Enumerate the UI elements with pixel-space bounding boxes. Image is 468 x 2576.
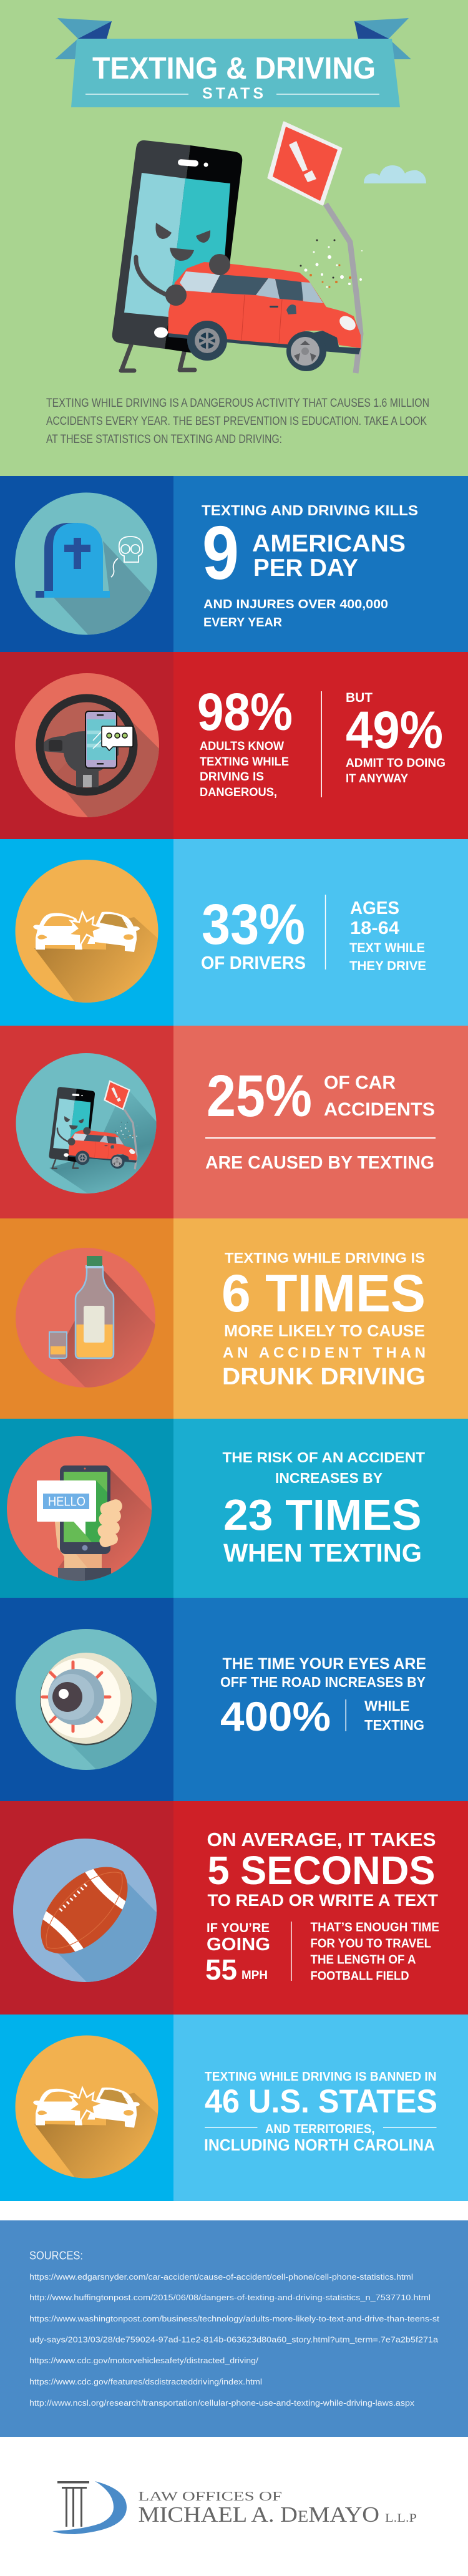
stat: 98% bbox=[197, 683, 293, 799]
stat text: 9 bbox=[202, 510, 239, 595]
stat text: TO READ OR WRITE A TEXT bbox=[207, 1891, 438, 1910]
red car bbox=[168, 262, 361, 371]
stat text: THE LENGTH OF A bbox=[311, 1953, 416, 1966]
stat text: EVERY YEAR bbox=[203, 616, 283, 629]
source links: http://www.huffingtonpost.com/2015/06/08/dangers-of-texting-and-driving-statistics_n_7537710.html bbox=[29, 2293, 431, 2302]
stat text: 6 TIMES bbox=[222, 1264, 426, 1323]
stat text: AN ACCIDENT THAN bbox=[223, 1344, 426, 1361]
stat text: THE RISK OF AN ACCIDENT bbox=[222, 1449, 425, 1465]
icon: car crash repeated bbox=[15, 2035, 176, 2181]
sources heading: SOURCES: bbox=[29, 2250, 83, 2262]
title banner: STATS bbox=[202, 85, 263, 102]
panel: hero bbox=[0, 0, 468, 476]
source links: https://www.cdc.gov/features/dsdistracteddriving/index.html bbox=[29, 2378, 262, 2386]
logo wordmark: LAW OFFICES OF bbox=[139, 2489, 282, 2504]
stat text: THAT’S ENOUGH TIME bbox=[311, 1920, 439, 1934]
stat: ages: AGES bbox=[350, 898, 399, 918]
phone character bbox=[112, 140, 242, 371]
logo wordmark: L.L.P bbox=[385, 2512, 417, 2525]
panel: 25% of car accidents bbox=[0, 1026, 468, 1218]
stat: 49%: BUT bbox=[346, 691, 373, 705]
icon: tombstone and skull bbox=[15, 493, 157, 635]
title banner bbox=[55, 18, 411, 107]
intro text bbox=[46, 397, 429, 446]
stat: 98%: DANGEROUS, bbox=[200, 786, 277, 799]
stat: 25%: ACCIDENTS bbox=[324, 1099, 435, 1120]
stat text: AND TERRITORIES, bbox=[265, 2122, 374, 2136]
stat text: INCREASES BY bbox=[275, 1470, 383, 1486]
stat text: 400% bbox=[220, 1693, 331, 1739]
panel: 9 Americans per day bbox=[0, 476, 468, 655]
stat text: AMERICANS bbox=[252, 530, 406, 557]
stat text: 5 SECONDS bbox=[207, 1848, 436, 1893]
icon: football bbox=[13, 1839, 157, 1982]
stat text: DRUNK DRIVING bbox=[222, 1364, 426, 1390]
stat text: ON AVERAGE, IT TAKES bbox=[207, 1829, 436, 1850]
stat: 98%: 98% bbox=[197, 683, 293, 741]
stat text: TEXTING AND DRIVING KILLS bbox=[202, 502, 418, 518]
stat text bbox=[222, 1449, 425, 1567]
panel: 5 seconds bbox=[0, 1801, 468, 2015]
source links: http://www.ncsl.org/research/transportation/cellular-phone-use-and-texting-while-driving-laws.aspx bbox=[29, 2399, 415, 2408]
icon: hand with phone and hello bubble: HELLO bbox=[48, 1495, 85, 1509]
stat text: IF YOU’RE bbox=[207, 1921, 270, 1935]
source links: https://www.washingtonpost.com/business/technology/adults-more-likely-to-text-and-drive-than-teens-st bbox=[29, 2315, 440, 2323]
panel: sources bbox=[0, 2220, 468, 2437]
stat text: PER DAY bbox=[253, 555, 358, 581]
stat: 49%: ADMIT TO DOING bbox=[346, 757, 446, 770]
source links: https://www.cdc.gov/motorvehiclesafety/distracted_driving/ bbox=[29, 2356, 259, 2365]
icon: mini crash illustration bbox=[16, 1053, 156, 1193]
stat: 98%: DRIVING IS bbox=[200, 770, 264, 784]
stat: ages: TEXT WHILE bbox=[349, 941, 425, 955]
stat: 98%: ADULTS KNOW bbox=[200, 740, 284, 753]
stat text: TEXTING bbox=[364, 1717, 424, 1733]
stat text: 23 TIMES bbox=[223, 1490, 422, 1539]
stat: 33%: OF DRIVERS bbox=[201, 953, 306, 973]
logo: law offices bbox=[52, 2481, 417, 2534]
icon: eyeball bbox=[16, 1629, 157, 1770]
stat text: FOR YOU TO TRAVEL bbox=[311, 1937, 431, 1950]
source links: udy-says/2013/03/28/de759024-97ad-11e2-814b-063623d80a60_story.html?utm_term=.7e7a2b5f271a bbox=[29, 2336, 438, 2345]
panel: 46 U.S. states bbox=[0, 2015, 468, 2201]
stat text: GOING bbox=[207, 1935, 270, 1955]
bent road sign bbox=[268, 122, 361, 373]
stat text bbox=[204, 2070, 437, 2154]
phone hands bbox=[165, 254, 230, 306]
icon: hand with phone and hello bubble bbox=[7, 1436, 156, 1587]
stat text: OFF THE ROAD INCREASES BY bbox=[220, 1674, 426, 1690]
stat: 33%: 33% bbox=[202, 893, 305, 956]
stat: 25%: ARE CAUSED BY TEXTING bbox=[205, 1153, 434, 1173]
stat text: INCLUDING NORTH CAROLINA bbox=[204, 2136, 435, 2154]
stat: 49%: IT ANYWAY bbox=[346, 772, 408, 785]
stat text: WHEN TEXTING bbox=[223, 1538, 422, 1567]
stat: 49%: 49% bbox=[346, 701, 443, 759]
stat text: FOOTBALL FIELD bbox=[311, 1969, 409, 1983]
stat: 49% bbox=[346, 691, 446, 785]
stat: ages: 18-64 bbox=[350, 918, 399, 938]
title banner: TEXTING & DRIVING bbox=[92, 52, 376, 85]
icon: bottle and shot glass bbox=[16, 1248, 155, 1388]
stat text: THE TIME YOUR EYES ARE bbox=[222, 1655, 426, 1673]
panel: 33% of drivers bbox=[0, 839, 468, 1026]
stat text bbox=[205, 1829, 439, 1986]
stat: 25%: OF CAR bbox=[324, 1072, 396, 1093]
intro text: AT THESE STATISTICS ON TEXTING AND DRIVING: bbox=[46, 433, 282, 446]
logo wordmark bbox=[139, 2489, 417, 2527]
stat text: WHILE bbox=[364, 1698, 409, 1714]
stat: 98%: TEXTING WHILE bbox=[200, 756, 289, 769]
logo mark bbox=[52, 2481, 127, 2534]
icon: steering wheel with phone bbox=[15, 673, 159, 817]
logo wordmark: MICHAEL A. D EMAYO bbox=[139, 2502, 379, 2527]
stat text bbox=[220, 1655, 426, 1739]
stat: ages bbox=[349, 898, 426, 973]
debris bbox=[300, 240, 363, 288]
panel: 98 percent know, 49 percent admit bbox=[0, 652, 468, 839]
source links: https://www.edgarsnyder.com/car-accident/cause-of-accident/cell-phone/cell-phone-statistics.html bbox=[29, 2273, 413, 2282]
panel: 23 times bbox=[0, 1419, 468, 1598]
stat text: AND INJURES OVER 400,000 bbox=[203, 598, 388, 611]
stat text bbox=[202, 502, 418, 629]
stat: 25%: 25% bbox=[207, 1063, 312, 1129]
illustration: phone crashing car into sign bbox=[112, 122, 363, 373]
panel: 400% bbox=[0, 1598, 468, 1801]
stat text: TEXTING WHILE DRIVING IS bbox=[225, 1250, 425, 1266]
panel: 6 times bbox=[0, 1218, 468, 1419]
stat text: 55 bbox=[205, 1953, 237, 1986]
stat text: TEXTING WHILE DRIVING IS BANNED IN bbox=[205, 2070, 437, 2084]
stat text: 46 U.S. STATES bbox=[205, 2083, 437, 2120]
stat text: MPH bbox=[241, 1969, 268, 1982]
stat text bbox=[222, 1250, 426, 1390]
icon: car crash bbox=[15, 860, 176, 1006]
stat: 25% bbox=[205, 1063, 436, 1173]
stat: ages: THEY DRIVE bbox=[349, 959, 426, 973]
icon: cloud bbox=[364, 165, 426, 183]
source links bbox=[29, 2273, 440, 2408]
stat text: MORE LIKELY TO CAUSE bbox=[224, 1321, 425, 1340]
